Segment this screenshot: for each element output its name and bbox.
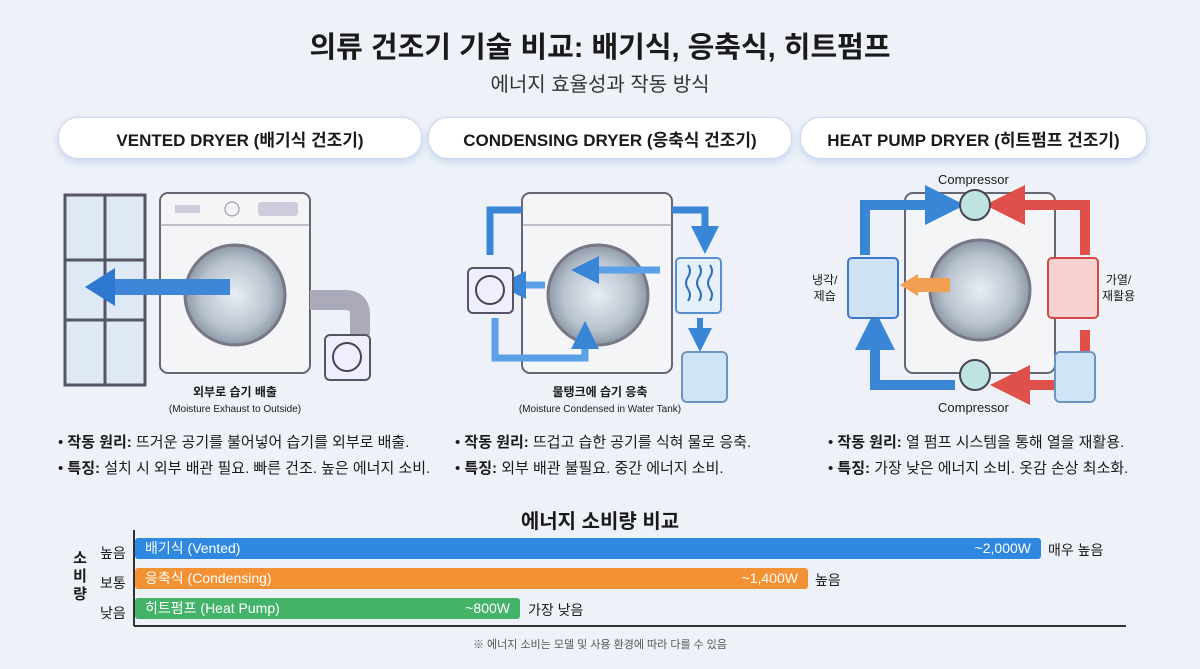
bullets: condensing: • 특징: 외부 배관 불필요. 중간 에너지 소비. [455,460,724,477]
label: cooling: 제습 [814,289,836,303]
caption: vented [169,385,301,415]
caption: vented: (Moisture Exhaust to Outside) [169,404,301,415]
bullets: condensing: • 작동 원리: 뜨겁고 습한 공기를 식혀 물로 응축. [455,434,751,451]
bullets: vented: • 작동 원리: 뜨거운 공기를 불어넣어 습기를 외부로 배출. [58,434,409,451]
subtitle: 에너지 효율성과 작동 방식 [490,74,710,96]
bar: heat pump: 히트펌프 (Heat Pump) [145,600,280,616]
label: high: 높음 [815,572,841,588]
level labels: 낮음 [100,605,126,621]
y axis label [73,550,87,603]
bar: vented: ~2,000W [975,540,1031,556]
level labels [100,545,126,621]
diagram: heat pump [848,190,1098,402]
label: heating: 가열/ [1106,273,1131,287]
bar: condensing: 응축식 (Condensing) [145,570,272,586]
label: compressor bottom: Compressor [938,400,1009,415]
bullets: heat pump: • 특징: 가장 낮은 에너지 소비. 옷감 손상 최소화. [828,460,1128,477]
label: lowest: 가장 낮음 [528,602,583,618]
bar: vented: 배기식 (Vented) [145,540,240,556]
window [65,195,145,385]
label: cooling: 냉각/ [812,273,837,287]
title: 의류 건조기 기술 비교: 배기식, 응축식, 히트펌프 [309,32,891,64]
header: condensing [428,117,792,159]
header: condensing: CONDENSING DRYER (응축식 건조기) [463,130,757,150]
bullets: heat pump [828,434,1128,477]
bar: vented [135,538,1041,559]
bullets: vented [58,434,430,477]
bar: condensing [135,568,808,589]
header: heat pump [800,117,1147,159]
diagram: vented [65,193,370,385]
caption: condensing: (Moisture Condensed in Water Tank) [519,404,681,415]
header: vented: VENTED DRYER (배기식 건조기) [116,130,364,150]
chart title: 에너지 소비량 비교 [521,511,679,533]
caption: condensing: 물탱크에 습기 응축 [552,385,648,399]
label: heating: 재활용 [1102,289,1135,303]
exhaust arrow [85,268,230,306]
bullets: vented: • 특징: 설치 시 외부 배관 필요. 빠른 건조. 높은 에너지 소비. [58,460,430,477]
chart axes [134,530,1126,626]
bullets: condensing [455,434,751,477]
bar: condensing: ~1,400W [742,570,798,586]
machine [160,193,310,373]
level labels: 보통 [100,575,126,591]
label: heating [1102,273,1135,303]
caption: vented: 외부로 습기 배출 [193,385,277,399]
y axis label: 량 [73,586,87,603]
bar: heat pump: ~800W [465,600,510,616]
footnote: ※ 에너지 소비는 모델 및 사용 환경에 따라 다를 수 있음 [473,639,727,651]
bar: heat pump [135,598,520,619]
label: very high: 매우 높음 [1048,542,1103,558]
header: vented [58,117,422,159]
y axis label: 소 [73,550,87,567]
duct and fan [310,300,370,380]
diagram: condensing [468,193,727,402]
y axis label: 비 [73,568,87,585]
caption: condensing [519,385,681,415]
bullets: heat pump: • 작동 원리: 열 펌프 시스템을 통해 열을 재활용. [828,434,1124,451]
level labels: 높음 [100,545,126,561]
label: compressor top: Compressor [938,172,1009,187]
label: cooling [812,273,838,303]
header: heat pump: HEAT PUMP DRYER (히트펌프 건조기) [827,130,1120,150]
